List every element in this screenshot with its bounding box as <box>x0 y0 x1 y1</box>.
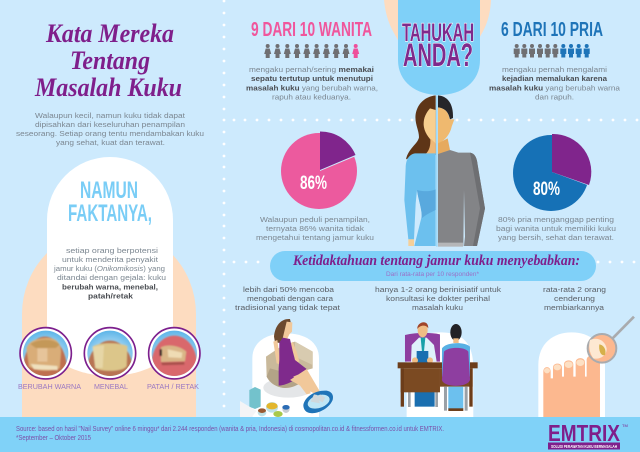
title: Kata Mereka <box>45 19 174 48</box>
icon row: women <box>264 44 359 58</box>
intro text block: dipisahkan dari keseluruhan penampilan <box>35 120 185 129</box>
labels: nail symptoms: MENEBAL <box>94 382 128 391</box>
text: wanita: rapuh atau keduanya. <box>272 92 351 102</box>
text: column membiarkan: rata-rata 2 orang <box>543 285 606 294</box>
text: pria: dan rapuh. <box>535 92 574 102</box>
heading: tahukah anda: TAHUKAH <box>402 19 474 47</box>
text: column tradisional: lebih dari 50% mencoba <box>243 285 335 294</box>
labels: nail symptoms: PATAH / RETAK <box>147 382 199 391</box>
text: column membiarkan: membiarkannya <box>544 303 605 312</box>
text: gejala: berubah warna, menebal, <box>62 282 158 292</box>
text: gejala: ditandai dengan gejala: kuku <box>57 273 166 282</box>
source text: Source: based on hasil "Nail Survey" online 6 minggu* dari 2.244 responden (wanita & pria, Indonesia) di cosmopolitan.co.id & fitnessformen.co.id untuk EMTRIX. <box>16 426 444 433</box>
magnifier <box>588 317 634 363</box>
intro text block: seseorang. Setiap orang tentu mendambakan kuku <box>16 129 204 138</box>
illustration: foot with magnifier <box>538 317 634 417</box>
labels: nail symptoms <box>18 382 199 391</box>
text: column konsultasi <box>375 285 501 312</box>
text: pie 80 caption: yang bersih, sehat dan terawat. <box>498 233 614 242</box>
logo: emtrix: SOLUSI PERAWATAN KUKU BERMASALAH <box>551 444 617 449</box>
intro text block: Walaupun kecil, namun kuku tidak dapat <box>35 111 186 120</box>
text: gejala: patah/retak <box>88 292 134 300</box>
pie chart: 80%: 80% <box>533 179 560 200</box>
doctor <box>405 322 440 366</box>
text: column membiarkan <box>543 285 606 312</box>
man <box>438 95 485 247</box>
text: pie 80 caption: 80% pria menganggap penting <box>498 215 614 224</box>
text: gejala: jamur kuku (Onikomikosis) yang <box>53 264 165 273</box>
banner: ketidaktahuan: Dari rata-rata per 10 responden* <box>386 271 479 278</box>
woman <box>404 95 436 246</box>
patient <box>442 324 470 411</box>
illustration: woman and man <box>404 95 485 247</box>
text: pie 86 caption: mengetahui tentang jamur kuku <box>256 233 374 242</box>
text: pie 86 caption: Walaupun peduli penampilan, <box>260 215 370 224</box>
text: pria: masalah kuku yang berubah warna <box>489 84 621 92</box>
text: gejala: setiap orang berpotensi <box>66 246 158 255</box>
text: column tradisional <box>235 285 341 312</box>
source text: *September – Oktober 2015 <box>16 435 91 442</box>
footer <box>0 417 640 452</box>
text: gejala <box>53 246 166 300</box>
heading: namun faktanya <box>68 177 152 227</box>
text: wanita: masalah kuku yang berubah warna, <box>246 84 378 92</box>
text: pie 80 caption: bagi wanita untuk memiliki kuku <box>496 224 616 233</box>
text: pie 80 caption <box>496 215 616 242</box>
banner: ketidaktahuan: Ketidaktahuan tentang jamur kuku menyebabkan: <box>292 253 580 269</box>
icon: nail menebal <box>84 326 136 380</box>
text: gejala: untuk menderita penyakit <box>62 255 159 264</box>
text: column membiarkan: cenderung <box>554 294 595 303</box>
text: wanita: sepatu tertutup untuk menutupi <box>251 74 373 83</box>
text: pie 86 caption <box>256 215 374 242</box>
title: Tentang <box>70 46 150 75</box>
pie chart: 80% <box>513 134 592 211</box>
desk <box>398 362 478 407</box>
pie chart: 86%: 86% <box>300 173 327 194</box>
text: pria: kejadian memalukan karena <box>502 74 608 83</box>
icon: nail patah <box>148 326 201 380</box>
panel: tahukah anda <box>384 0 491 95</box>
text: wanita: mengaku pernah/sering memakai <box>249 65 374 74</box>
foot <box>543 355 600 417</box>
text: pria <box>489 65 621 102</box>
title <box>34 19 182 102</box>
text: pie 86 caption: ternyata 86% wanita tidak <box>266 224 364 233</box>
text: wanita <box>246 65 378 102</box>
text: column tradisional: tradisional yang tidak tepat <box>235 303 341 312</box>
icon row: men <box>514 44 590 58</box>
heading: namun faktanya: NAMUN <box>80 177 138 204</box>
banner: ketidaktahuan <box>270 251 596 281</box>
text: column tradisional: mengobati dengan cara <box>247 294 334 303</box>
pie chart: 86% <box>281 131 357 209</box>
intro text block <box>16 111 204 147</box>
illustration: woman foot spa <box>240 319 333 417</box>
illustration: doctor consultation <box>398 322 478 417</box>
icon: nail berubah warna <box>19 326 72 380</box>
text: column konsultasi: masalah kuku <box>412 303 463 312</box>
heading: tahukah anda: ANDA? <box>403 37 473 73</box>
panel: namun faktanya <box>22 157 196 417</box>
source text <box>16 426 444 442</box>
stat: 9 dari 10 wanita: 9 DARI 10 WANITA <box>251 19 372 41</box>
stat: 9 dari 10 wanita <box>246 19 378 102</box>
logo: emtrix: EMTRIX <box>548 420 621 446</box>
heading: namun faktanya: FAKTANYA, <box>68 200 152 227</box>
text: column konsultasi: konsultasi ke dokter perihal <box>386 294 490 303</box>
text: column konsultasi: hanya 1-2 orang berinisiatif untuk <box>375 285 501 294</box>
logo: emtrix: TM <box>622 423 628 428</box>
stat: 6 dari 10 pria <box>489 19 621 102</box>
heading: tahukah anda <box>402 19 474 73</box>
text: pria: mengaku pernah mengalami <box>502 65 607 74</box>
labels: nail symptoms: BERUBAH WARNA <box>18 382 81 391</box>
intro text block: yang sehat, kuat dan terawat. <box>56 138 165 147</box>
title: Masalah Kuku <box>34 73 182 102</box>
